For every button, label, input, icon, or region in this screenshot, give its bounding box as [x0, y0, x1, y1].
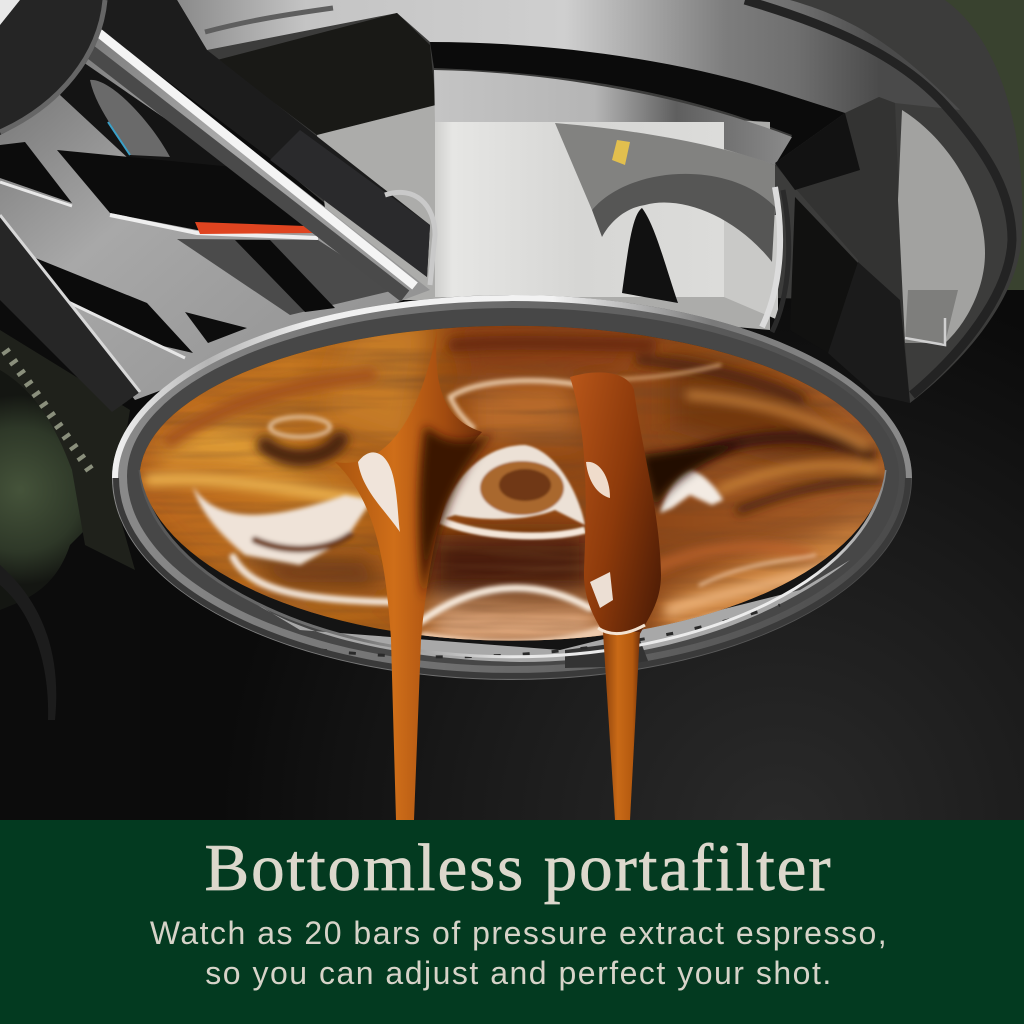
description text: so you can adjust and perfect your shot.: [205, 955, 833, 991]
description text: [150, 915, 888, 991]
top left disc: [0, 0, 105, 135]
wood-like grain: [140, 340, 879, 640]
left chrome spout and fins: [0, 0, 435, 412]
sensor window: [60, 60, 240, 170]
description text: Watch as 20 bars of pressure extract espresso,: [150, 915, 888, 951]
chrome rod: [88, 50, 405, 296]
caption band: [0, 820, 1024, 1024]
central bubble: [440, 445, 585, 536]
filter basket: [140, 326, 885, 657]
chrome top edge: [115, 298, 909, 478]
portafilter rim: [112, 295, 912, 680]
green corner top right: [900, 0, 1024, 290]
diagonal dark bar: [100, 0, 430, 277]
cylinder: [435, 122, 724, 297]
left espresso stream: [335, 330, 495, 820]
left machine body: [0, 300, 140, 820]
espresso surface: [140, 326, 885, 641]
right window: [898, 110, 985, 343]
upper chrome housing: [177, 0, 1022, 403]
strut: [775, 97, 910, 403]
heading: Bottomless portafilter: [205, 831, 832, 905]
right espresso stream: [570, 372, 745, 820]
